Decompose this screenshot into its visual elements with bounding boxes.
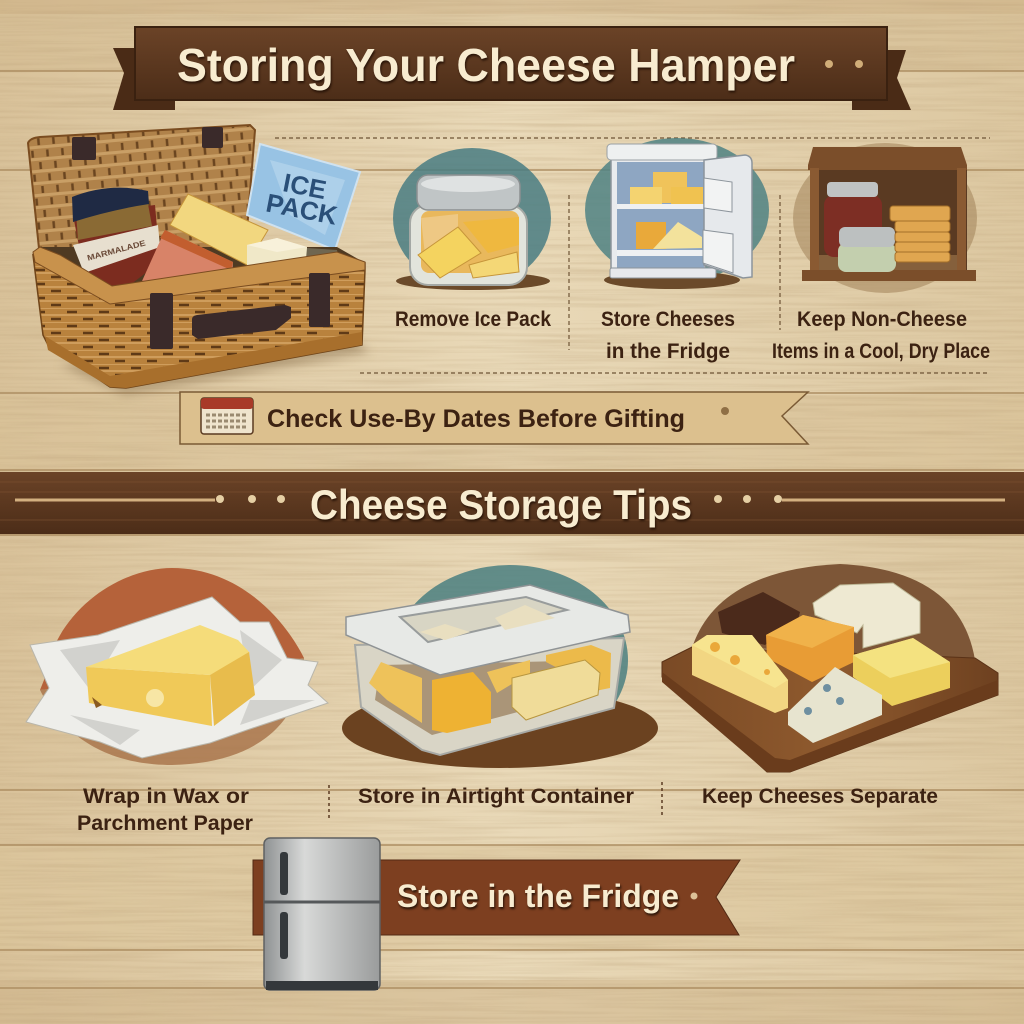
illustration: wrapped cheese bbox=[26, 568, 328, 765]
icon: cheese jar bbox=[393, 148, 551, 290]
label: store cheeses in the fridge: Store Cheeses bbox=[601, 308, 735, 331]
icon: pantry shelf bbox=[793, 143, 977, 293]
label: remove ice pack: Remove Ice Pack bbox=[395, 308, 551, 331]
icon: pink cheese bbox=[138, 230, 233, 290]
section heading: Cheese Storage Tips bbox=[310, 481, 692, 528]
title text: Storing Your Cheese Hamper bbox=[177, 39, 795, 91]
icon: ice pack bbox=[247, 144, 360, 250]
dashed dividers bbox=[329, 782, 662, 818]
icon: white cheese bbox=[247, 238, 307, 275]
label: store cheeses in the fridge: in the Fridge bbox=[606, 340, 730, 363]
dashed guide lines bbox=[275, 138, 990, 373]
illustration: airtight container bbox=[342, 565, 658, 768]
icon: steel fridge bbox=[264, 838, 380, 990]
label: wrap in wax bbox=[77, 785, 253, 835]
use-by ribbon bbox=[180, 392, 808, 444]
fridge ribbon bbox=[253, 860, 740, 935]
label: store in airtight container: Store in Airtight Container bbox=[358, 785, 634, 808]
label: store cheeses in the fridge bbox=[601, 308, 735, 363]
label: keep non-cheese items bbox=[772, 308, 990, 363]
label: wrap in wax: Wrap in Wax or bbox=[83, 785, 249, 808]
illustration: cheese board bbox=[662, 564, 998, 772]
icon: jam jar: MARMALADE bbox=[86, 238, 147, 263]
icon: basket straps and handle bbox=[150, 273, 330, 349]
icon: fridge bbox=[585, 138, 769, 289]
icon: ice pack: PACK bbox=[264, 188, 340, 231]
ribbon text: Check Use-By Dates Before Gifting bbox=[267, 405, 685, 433]
section banner bbox=[0, 472, 1024, 534]
label: keep non-cheese items: Items in a Cool, Dry Place bbox=[772, 340, 990, 363]
icon: ice pack: ICE bbox=[281, 167, 329, 205]
label: keep cheeses separate: Keep Cheeses Separate bbox=[702, 785, 938, 808]
ribbon label: Store in the Fridge bbox=[397, 878, 679, 914]
illustration: hamper basket bbox=[28, 125, 370, 395]
label: keep non-cheese items: Keep Non-Cheese bbox=[797, 308, 967, 331]
title banner bbox=[113, 27, 911, 110]
icon: calendar bbox=[201, 398, 253, 434]
icon: jam jar bbox=[72, 188, 160, 292]
label: wrap in wax: Parchment Paper bbox=[77, 812, 253, 835]
icon: yellow cheese bbox=[170, 194, 268, 265]
